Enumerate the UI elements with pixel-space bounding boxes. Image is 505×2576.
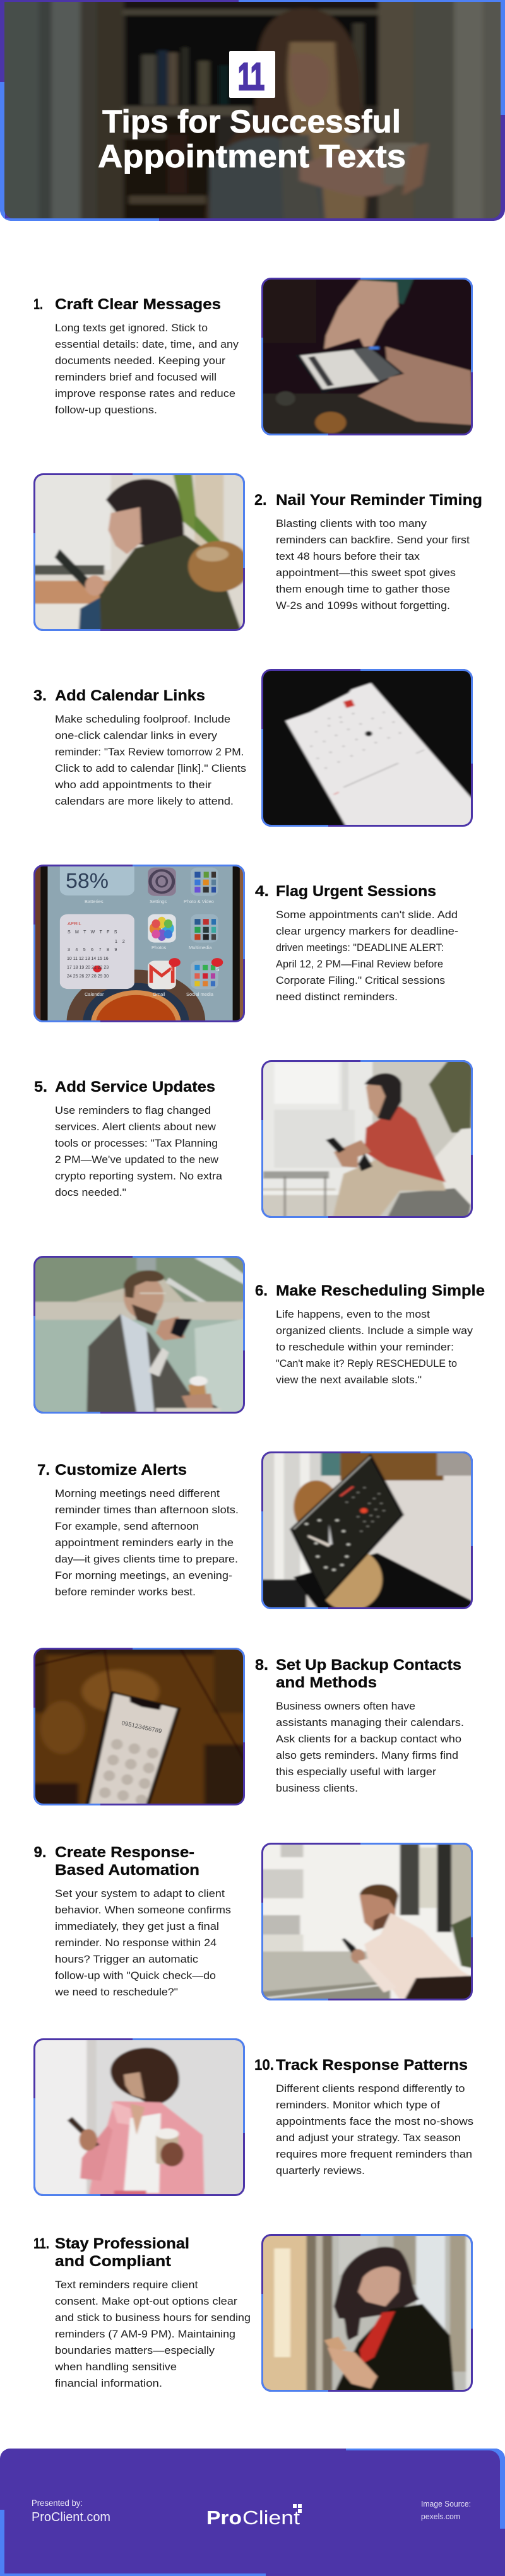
- tip 11 body text: [54, 2279, 251, 2389]
- tip 2 photo: woman with tablet: [33, 473, 245, 631]
- tip 4 photo: phone home screen widgets: Batteries: [85, 899, 104, 904]
- tip 9 body text: Set your system to adapt to client: [55, 1888, 225, 1900]
- tip 2 body text: text 48 hours before their tax: [276, 551, 420, 562]
- tip 11 body text: financial information.: [55, 2378, 162, 2389]
- tip 8 body text: Ask clients for a backup contact who: [276, 1734, 461, 1745]
- tip 4 photo: phone home screen widgets: 3: [169, 966, 173, 972]
- tip 4 photo: phone home screen widgets: 3456789: [68, 948, 122, 952]
- tip 7 panel: [38, 1451, 473, 1609]
- tip 9 panel: [34, 1843, 473, 2000]
- tip 5 body text: 2 PM—We've updated to the new: [55, 1154, 218, 1166]
- tip 9 body text: behavior. When someone confirms: [55, 1905, 231, 1916]
- tip 2 body text: reminders can backfire. Send your first: [276, 535, 470, 546]
- tip 9 body text: [54, 1888, 231, 1998]
- tip 9 heading: 9.: [34, 1844, 47, 1861]
- tip 5 body text: tools or processes: "Tax Planning: [55, 1138, 218, 1149]
- tip 8 body text: this especially useful with larger: [276, 1766, 437, 1778]
- tip 5 body text: crypto reporting system. No extra: [55, 1171, 223, 1182]
- main title: [98, 103, 406, 174]
- tip 9 body text: follow-up with "Quick check—do: [55, 1970, 216, 1982]
- tip 1 body text: improve response rates and reduce: [55, 388, 235, 399]
- tip 1 panel: [34, 278, 473, 435]
- tip 4 photo: phone home screen widgets: 12: [115, 940, 130, 944]
- tip 8 photo: phone dial pad on wooden floor: 095123456789: [121, 1720, 162, 1735]
- tip 4 body text: driven meetings: "DEADLINE ALERT:: [276, 942, 444, 954]
- tip 9 body text: reminder. No response within 24: [55, 1937, 217, 1949]
- tip 8 body text: also gets reminders. Many firms find: [276, 1750, 458, 1761]
- tip 10 body text: Different clients respond differently to: [276, 2083, 465, 2094]
- tip 1 body text: Long texts get ignored. Stick to: [55, 322, 208, 334]
- tip 6 body text: to reschedule within your reminder:: [276, 1342, 454, 1353]
- tip 10 body text: reminders. Monitor which type of: [276, 2100, 440, 2111]
- tip 3 body text: calendars are more likely to attend.: [55, 796, 234, 807]
- tip 1 heading: Craft Clear Messages: [55, 296, 221, 313]
- tip 6 photo: man with phone by fountain: [33, 1256, 245, 1414]
- tip 5 photo: man in red polo: [261, 1060, 473, 1218]
- tip 7 body text: For morning meetings, an evening-: [55, 1570, 232, 1581]
- logo: ProClient: Pro: [206, 2507, 242, 2529]
- tip 6 body text: view the next available slots.": [276, 1374, 422, 1386]
- tip 4 photo: phone home screen widgets: 10 11 12 13 14 15 16: [67, 957, 109, 961]
- tip 6 heading: 6.: [255, 1282, 268, 1299]
- tip 7 heading: 7.: [37, 1462, 50, 1479]
- tip 8 heading: Set Up Backup Contacts: [276, 1657, 461, 1674]
- tip 8 body text: Business owners often have: [276, 1701, 415, 1712]
- main title: Tips for Successful: [102, 103, 401, 139]
- hero banner: [0, 0, 505, 229]
- tip 11 heading: and Compliant: [55, 2253, 171, 2270]
- tip 9 heading: [34, 1844, 199, 1879]
- tip 7 photo: phone standby clock on wood stand: [261, 1451, 473, 1609]
- main title: Appointment Texts: [98, 138, 406, 174]
- tip 11 body text: Text reminders require client: [55, 2279, 198, 2291]
- tip 10 body text: requires more frequent reminders than: [276, 2149, 472, 2160]
- tip 9 body text: immediately, they get just a final: [55, 1921, 219, 1932]
- tip 4 photo: phone home screen widgets: Social media: [186, 991, 214, 997]
- tip 4 photo: phone home screen widgets: 58%: [66, 869, 109, 892]
- tip 3 body text: Make scheduling foolproof. Include: [55, 714, 230, 725]
- tip 8 body text: assistants managing their calendars.: [276, 1717, 464, 1728]
- tip 4 photo: phone home screen widgets: Photos: [152, 945, 167, 950]
- number badge: [229, 51, 275, 98]
- tip 4 photo: phone home screen widgets: APRIL: [68, 921, 81, 926]
- tip 2 body text: appointment—this sweet spot gives: [276, 567, 456, 579]
- tip 11 body text: and stick to business hours for sending: [55, 2312, 251, 2324]
- tip 7 heading: Customize Alerts: [55, 1462, 187, 1479]
- tip 6 body text: organized clients. Include a simple way: [276, 1325, 473, 1337]
- tip 4 body text: need distinct reminders.: [276, 991, 398, 1003]
- tip 4 photo: phone home screen widgets: Gmail: [153, 991, 165, 997]
- tip 2 heading: Nail Your Reminder Timing: [276, 492, 482, 509]
- tip 8 body text: business clients.: [276, 1783, 358, 1794]
- tip 10 heading: Track Response Patterns: [276, 2057, 468, 2074]
- tip 7 body text: [55, 1488, 239, 1598]
- tip 11 photo: woman in black jacket: [261, 2234, 473, 2392]
- tip 6 body text: "Can't make it? Reply RESCHEDULE to: [276, 1358, 457, 1369]
- tip 1 body text: essential details: date, time, and any: [55, 339, 239, 350]
- tip 8 photo: phone dial pad on wooden floor: [33, 1648, 245, 1805]
- number badge: 11: [238, 56, 264, 98]
- tip 4 photo: phone home screen widgets: Settings: [150, 899, 167, 904]
- tip 4 body text: Some appointments can't slide. Add: [276, 909, 458, 921]
- tip 11 heading: 11.: [33, 2235, 49, 2252]
- tip 3 panel: [33, 669, 473, 827]
- tip 1 body text: reminders brief and focused will: [55, 372, 217, 383]
- tip 11 heading: Stay Professional: [55, 2235, 189, 2252]
- tip 8 body text: [276, 1701, 464, 1794]
- tip 3 body text: one-click calendar links in every: [55, 730, 218, 741]
- tip 11 body text: boundaries matters—especially: [55, 2345, 215, 2356]
- tip 3 body text: [54, 714, 246, 807]
- tip 10 body text: [276, 2083, 473, 2177]
- tip 10 heading: 10.: [254, 2057, 274, 2074]
- tip 8 heading: 8.: [255, 1657, 268, 1674]
- tip 3 heading: Add Calendar Links: [55, 687, 205, 704]
- tip 5 heading: Add Service Updates: [55, 1078, 215, 1096]
- tip 3 photo: calendar on phone: [261, 669, 473, 827]
- tip 4 body text: clear urgency markers for deadline-: [276, 926, 458, 937]
- tip 1 photo: hands typing on phone: [261, 278, 473, 435]
- tip 9 photo: man in white shirt at window: [261, 1843, 473, 2000]
- tip 7 body text: For example, send afternoon: [55, 1521, 199, 1532]
- tip 2 body text: [276, 518, 470, 612]
- tip 11 body text: when handling sensitive: [54, 2361, 177, 2373]
- tip 11 body text: reminders (7 AM-9 PM). Maintaining: [55, 2329, 235, 2340]
- tip 4 photo: phone home screen widgets: 17 18 19 20 21 22 23: [67, 966, 109, 970]
- tip 4 panel: [33, 865, 458, 1022]
- tip 7 body text: appointment reminders early in the: [55, 1537, 234, 1549]
- tip 2 body text: W-2s and 1099s without forgetting.: [276, 600, 450, 612]
- tip 4 photo: phone home screen widgets: 5: [216, 966, 220, 972]
- image source: pexels.com: [421, 2512, 460, 2521]
- tip 1 heading: 1.: [33, 296, 43, 313]
- tip 7 body text: before reminder works best.: [55, 1586, 196, 1598]
- tip 3 body text: who add appointments to their: [54, 779, 212, 791]
- tip 2 body text: Blasting clients with too many: [276, 518, 427, 529]
- tip 5 body text: Use reminders to flag changed: [55, 1105, 211, 1116]
- tip 6 body text: [276, 1309, 473, 1386]
- tip 2 heading: 2.: [254, 492, 266, 509]
- tip 3 heading: 3.: [33, 687, 47, 704]
- tip 10 panel: [33, 2038, 473, 2196]
- tip 6 body text: Life happens, even to the most: [276, 1309, 430, 1320]
- tip 5 body text: services. Alert clients about new: [55, 1121, 216, 1133]
- presented by: ProClient.com: [32, 2510, 110, 2524]
- tip 5 panel: [34, 1060, 473, 1218]
- tip 3 body text: Click to add to calendar [link]." Clients: [55, 763, 246, 774]
- tip 2 body text: them enough time to gather those: [276, 584, 450, 595]
- tip 4 photo: phone home screen widgets: Multimedia: [189, 945, 212, 950]
- tip 4 photo: phone home screen widgets: [33, 865, 245, 1022]
- tip 11 body text: consent. Make opt-out options clear: [55, 2296, 238, 2307]
- tip 11 panel: [34, 2234, 473, 2392]
- footer band: [0, 2449, 505, 2576]
- tip 11 heading: [33, 2235, 189, 2270]
- tip 4 photo: phone home screen widgets: Calendar: [85, 991, 104, 997]
- tip 7 body text: day—it gives clients time to prepare.: [55, 1554, 238, 1565]
- tip 4 photo: phone home screen widgets: SMTWTFS: [68, 930, 122, 935]
- image source: [421, 2499, 471, 2521]
- tip 10 body text: appointments face the most no-shows: [276, 2116, 473, 2127]
- presented by: [32, 2498, 110, 2524]
- tip 2 panel: [33, 473, 481, 631]
- tip 4 body text: [276, 909, 458, 1003]
- tip 7 body text: reminder times than afternoon slots.: [55, 1504, 239, 1516]
- tip 3 body text: reminder: "Tax Review tomorrow 2 PM.: [55, 747, 244, 758]
- tip 8 heading: and Methods: [276, 1674, 377, 1691]
- image source: Image Source:: [421, 2499, 471, 2508]
- tip 4 photo: phone home screen widgets: Photo & Video: [184, 899, 214, 904]
- tip 5 heading: 5.: [34, 1078, 47, 1096]
- logo: ProClient: Client: [242, 2507, 300, 2529]
- tip 8 panel: [33, 1648, 463, 1805]
- presented by: Presented by:: [32, 2498, 83, 2508]
- tip 4 heading: Flag Urgent Sessions: [276, 883, 436, 900]
- tip 9 heading: Create Response-: [55, 1844, 194, 1861]
- tip 6 heading: Make Rescheduling Simple: [276, 1282, 485, 1299]
- tip 10 body text: quarterly reviews.: [276, 2165, 365, 2177]
- tip 4 photo: phone home screen widgets: 24 25 26 27 28 29 30: [67, 974, 109, 979]
- tip 7 body text: Morning meetings need different: [55, 1488, 220, 1499]
- tip 9 body text: hours? Trigger an automatic: [55, 1954, 198, 1965]
- tip 10 photo: woman in pink blazer: [33, 2038, 245, 2196]
- tip 1 body text: documents needed. Keeping your: [55, 355, 226, 367]
- tip 4 body text: April 12, 2 PM—Final Review before: [276, 959, 443, 970]
- tip 1 body text: [55, 322, 239, 416]
- tip 5 body text: docs needed.": [55, 1187, 126, 1198]
- tip 1 body text: follow-up questions.: [55, 405, 157, 416]
- tip 5 body text: [55, 1105, 223, 1198]
- logo: ProClient: [206, 2504, 302, 2529]
- tip 10 body text: and adjust your strategy. Tax season: [276, 2132, 461, 2144]
- tip 8 heading: [255, 1657, 461, 1691]
- hero background photo: [0, 0, 505, 229]
- tip 6 panel: [33, 1256, 485, 1414]
- tip 4 heading: 4.: [255, 883, 269, 900]
- tip 9 heading: Based Automation: [55, 1862, 199, 1879]
- tip 4 body text: Corporate Filing." Critical sessions: [276, 975, 445, 986]
- tip 9 body text: we need to reschedule?": [54, 1987, 178, 1998]
